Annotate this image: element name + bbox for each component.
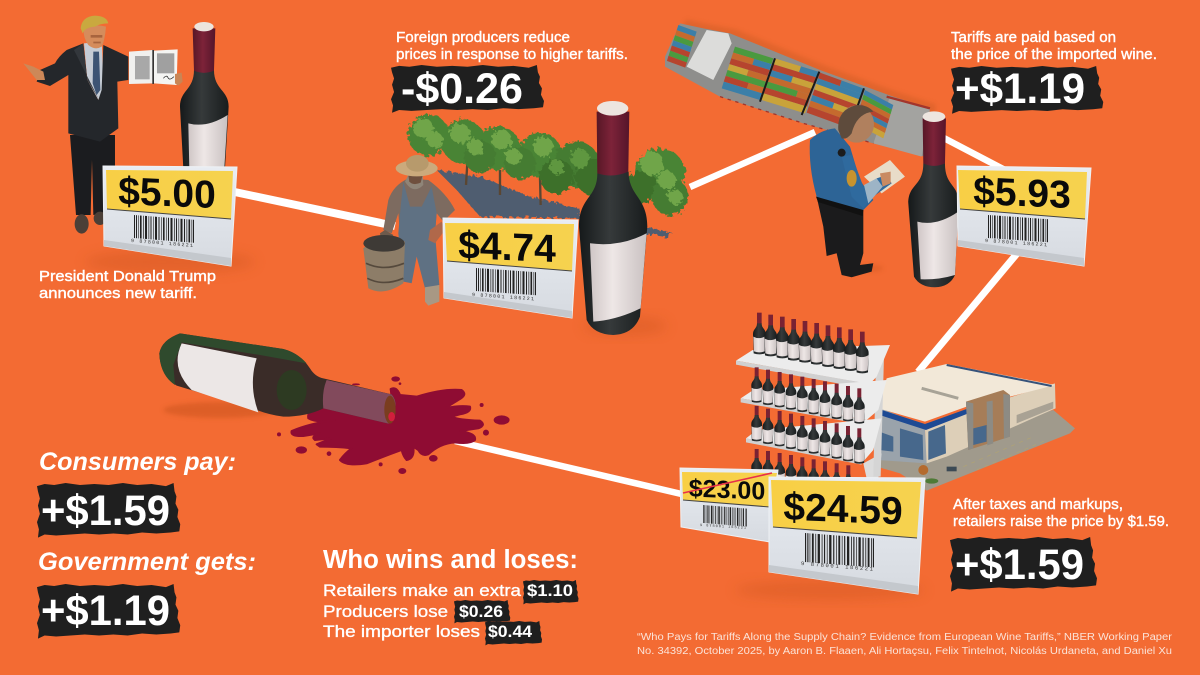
heading: government gets: Government gets: xyxy=(38,548,256,576)
shadow: spilled bottle xyxy=(163,402,277,418)
shadow: announcement xyxy=(85,250,255,274)
price tag: $4.74: $4.74 xyxy=(458,224,556,271)
illustration: container ship xyxy=(665,19,936,157)
price tag: $5.93 xyxy=(957,166,1091,266)
panel: who wins and loses xyxy=(323,546,578,645)
amount: government plus $1.19: +$1.19 xyxy=(41,587,170,635)
caption: tariffs: Tariffs are paid based on xyxy=(951,30,1116,46)
price tag: $5.00: 9 878001 186221 xyxy=(131,238,193,249)
figure: customs officer with clipboard xyxy=(810,105,905,277)
illustration: store building xyxy=(877,364,1075,491)
row: importer: $0.44 xyxy=(488,623,533,641)
caption: tariffs: the price of the imported wine. xyxy=(951,47,1157,63)
panel: container ship and tariff xyxy=(665,19,1157,287)
row: importer: The importer loses xyxy=(323,623,480,641)
row: importer xyxy=(323,621,542,645)
icon: wine spill xyxy=(277,376,510,474)
heading: consumers pay: Consumers pay: xyxy=(39,448,236,476)
amount: plus $1.19: +$1.19 xyxy=(955,65,1085,113)
shadow: large bottle xyxy=(583,316,667,336)
price tag: $5.93: 9 878001 186221 xyxy=(985,238,1047,248)
amount: plus $1.59 retailers: +$1.59 xyxy=(955,541,1084,589)
source note: “Who Pays for Tariffs Along the Supply Chain? Evidence from European Wine Tariffs,” NBER Working Paper xyxy=(637,632,1173,643)
price tag: old price $23.00 crossed out: $23.00 xyxy=(689,474,765,506)
caption: retailers: retailers raise the price by $1.59. xyxy=(953,514,1169,530)
row: producers: $0.26 xyxy=(459,603,503,621)
icon: large wine bottle xyxy=(579,101,647,335)
caption: announcement xyxy=(39,269,216,302)
price tag: $5.00: $5.00 xyxy=(118,170,216,217)
price tag: $5.00 xyxy=(103,166,237,266)
shadow: retail tags xyxy=(735,580,925,600)
figure: president with signed document xyxy=(23,16,183,234)
panel: summary totals xyxy=(37,448,256,639)
amount: consumers plus $1.59: +$1.59 xyxy=(41,487,170,535)
row: retailers: $1.10 xyxy=(527,582,573,600)
caption: announcement: announces new tariff. xyxy=(39,286,197,302)
caption: announcement: President Donald Trump xyxy=(39,269,216,285)
heading: who wins and loses: Who wins and loses: xyxy=(323,546,578,574)
panel: foreign producers xyxy=(363,30,688,336)
row: retailers: Retailers make an extra xyxy=(323,582,522,600)
price tag: new price $24.59: $24.59 xyxy=(783,486,903,533)
illustration: vineyard xyxy=(408,114,688,237)
caption: tariffs xyxy=(951,30,1157,63)
icon: wine bottle with tag xyxy=(908,111,959,287)
row: producers: Producers lose xyxy=(323,603,448,621)
price tag: new price $24.59: 9 878001 186221 xyxy=(801,560,874,573)
price tag: $5.93: $5.93 xyxy=(973,170,1071,217)
panel: retailer xyxy=(680,313,1169,600)
row: producers xyxy=(323,600,510,623)
panel: tariff announcement xyxy=(23,16,255,302)
price tag: $4.74: 9 878001 186221 xyxy=(472,292,534,302)
caption: retailers xyxy=(953,497,1169,530)
caption: producers xyxy=(396,30,628,63)
illustration: wine shelves xyxy=(736,313,890,501)
source note xyxy=(637,632,1173,657)
strikethrough xyxy=(683,473,772,493)
panel: spilled wine xyxy=(159,333,510,474)
caption: producers: prices in response to higher tariffs. xyxy=(396,47,628,63)
price tag: old price $23.00 crossed out xyxy=(680,468,778,542)
price tag: old price $23.00 crossed out: 9 878001 186221 xyxy=(700,524,746,531)
row: retailers xyxy=(323,580,578,604)
icon: fallen wine bottle xyxy=(159,333,396,424)
caption: producers: Foreign producers reduce xyxy=(396,30,570,46)
source note: No. 34392, October 2025, by Aaron B. Flaaen, Ali Hortaçsu, Felix Tintelnot, Nicolás Urdaneta, and Daniel Xu xyxy=(637,646,1172,657)
figure: farmer with bucket xyxy=(363,155,455,306)
caption: retailers: After taxes and markups, xyxy=(953,497,1123,513)
price tag: $4.74 xyxy=(443,218,578,318)
amount: minus $0.26: -$0.26 xyxy=(401,65,523,113)
price tag: new price $24.59 xyxy=(769,477,925,594)
connector lines xyxy=(230,132,1020,496)
icon: wine bottle xyxy=(180,22,229,168)
